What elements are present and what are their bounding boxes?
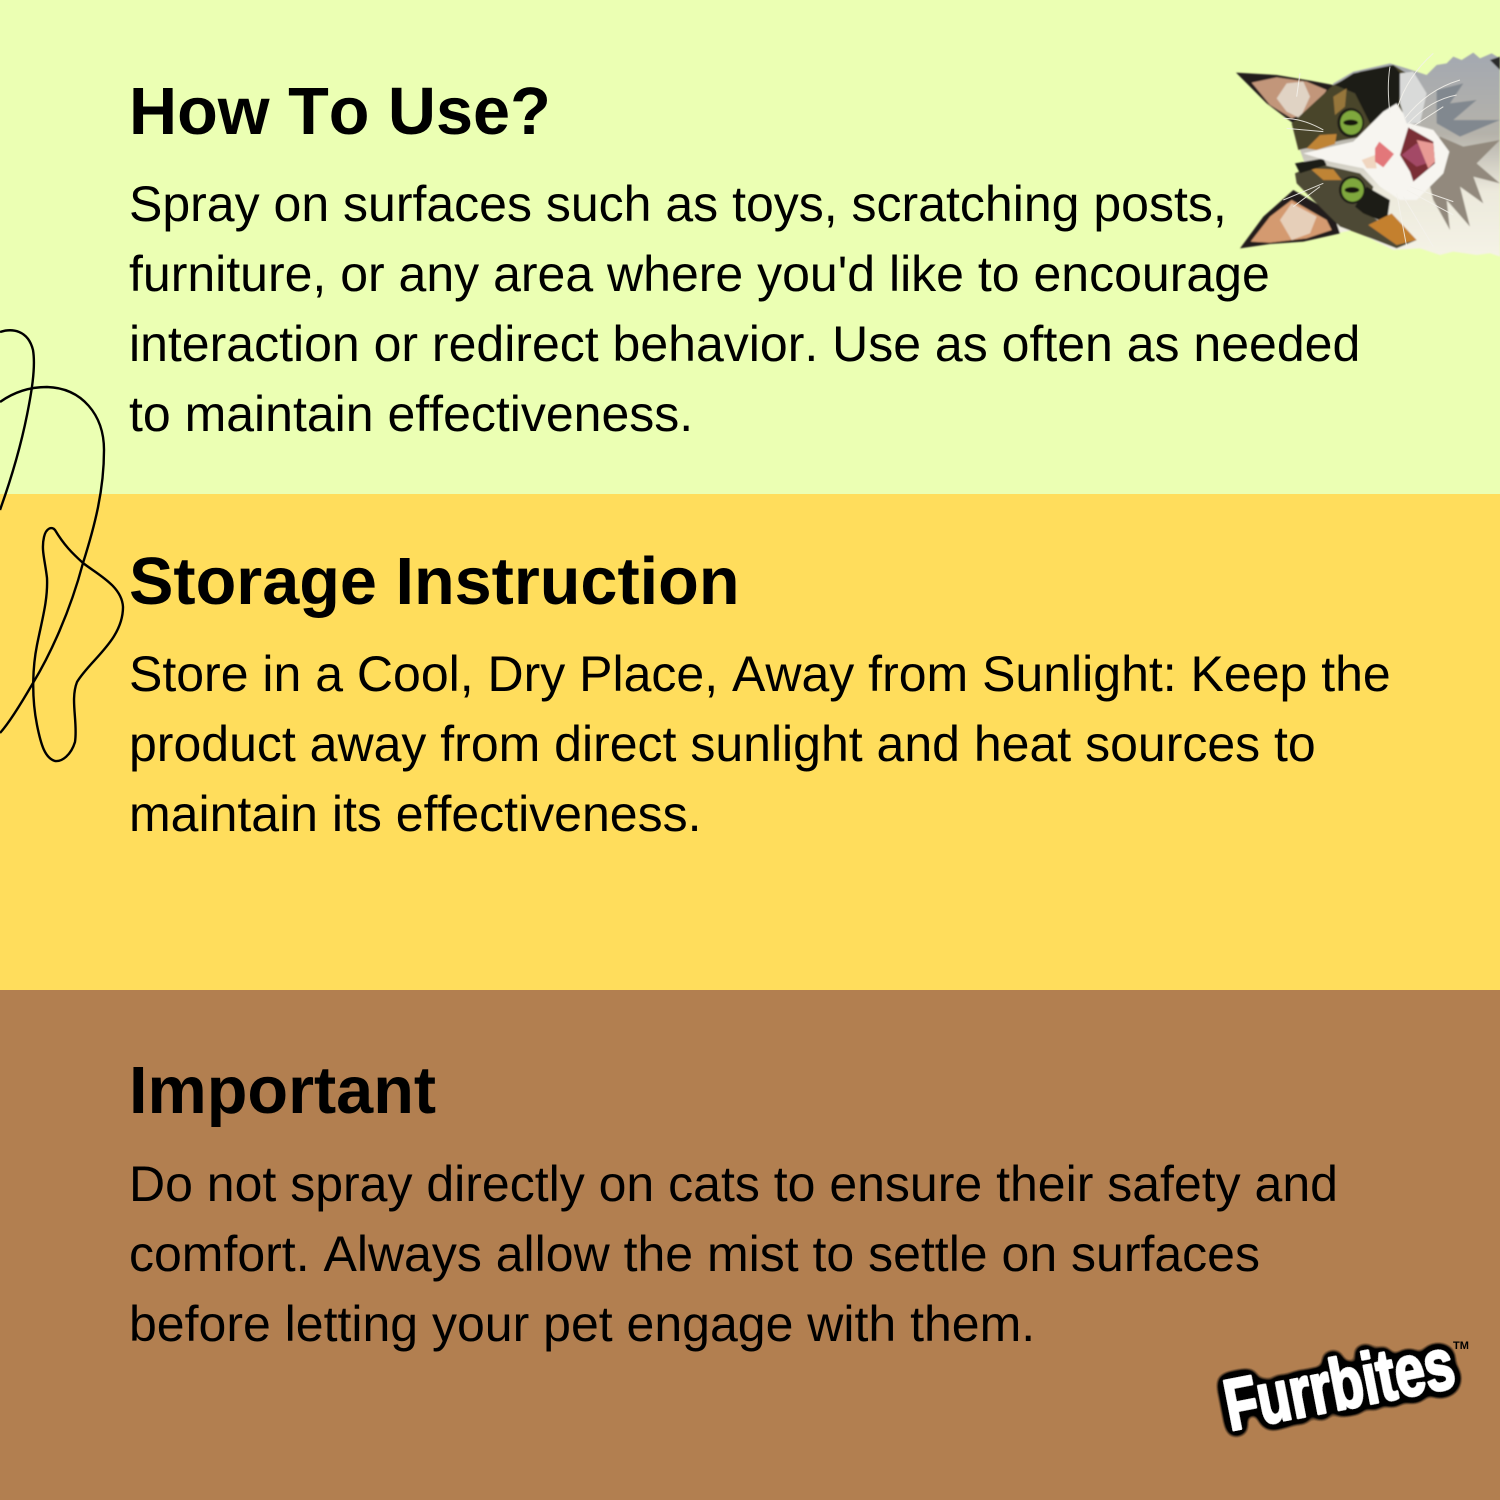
text block: how to use: to maintain effectiveness.	[129, 386, 693, 442]
heading: how to use: How To Use?	[129, 75, 551, 149]
text block: important: comfort. Always allow the mist to settle on surfaces	[129, 1226, 1260, 1282]
cat face dark patches	[1292, 65, 1407, 150]
heading: storage instruction: Storage Instruction	[129, 545, 740, 619]
text block: storage instruction: maintain its effectiveness.	[129, 786, 702, 842]
illustration: calico cat head	[1236, 52, 1500, 257]
logo trademark: TM	[1453, 1340, 1469, 1352]
text block: important: before letting your pet engage with them.	[129, 1296, 1035, 1352]
panel: how to use background	[0, 0, 1500, 494]
cat white muzzle	[1303, 103, 1449, 200]
text block: how to use	[129, 176, 1360, 442]
cat body fur	[1300, 53, 1500, 257]
heading: important: Important	[129, 1054, 436, 1128]
text block: how to use: furniture, or any area where you'd like to encourage	[129, 246, 1270, 302]
cat whiskers	[1283, 53, 1460, 247]
cat eyes	[1337, 108, 1364, 137]
cat nose	[1375, 142, 1394, 167]
cat mouth	[1400, 127, 1435, 182]
text block: storage instruction: product away from direct sunlight and heat sources to	[129, 716, 1316, 772]
text block: storage instruction: Store in a Cool, Dry Place, Away from Sunlight: Keep the	[129, 646, 1391, 702]
text block: storage instruction	[129, 646, 1391, 842]
panel: important background	[0, 990, 1500, 1500]
decorative squiggle line	[0, 329, 124, 762]
panel: storage instruction background	[0, 494, 1500, 990]
cat ears	[1236, 73, 1333, 123]
text block: important	[129, 1156, 1338, 1352]
text block: how to use: interaction or redirect behavior. Use as often as needed	[129, 316, 1360, 372]
text block: important: Do not spray directly on cats to ensure their safety and	[129, 1156, 1338, 1212]
text block: how to use: Spray on surfaces such as toys, scratching posts,	[129, 176, 1227, 232]
